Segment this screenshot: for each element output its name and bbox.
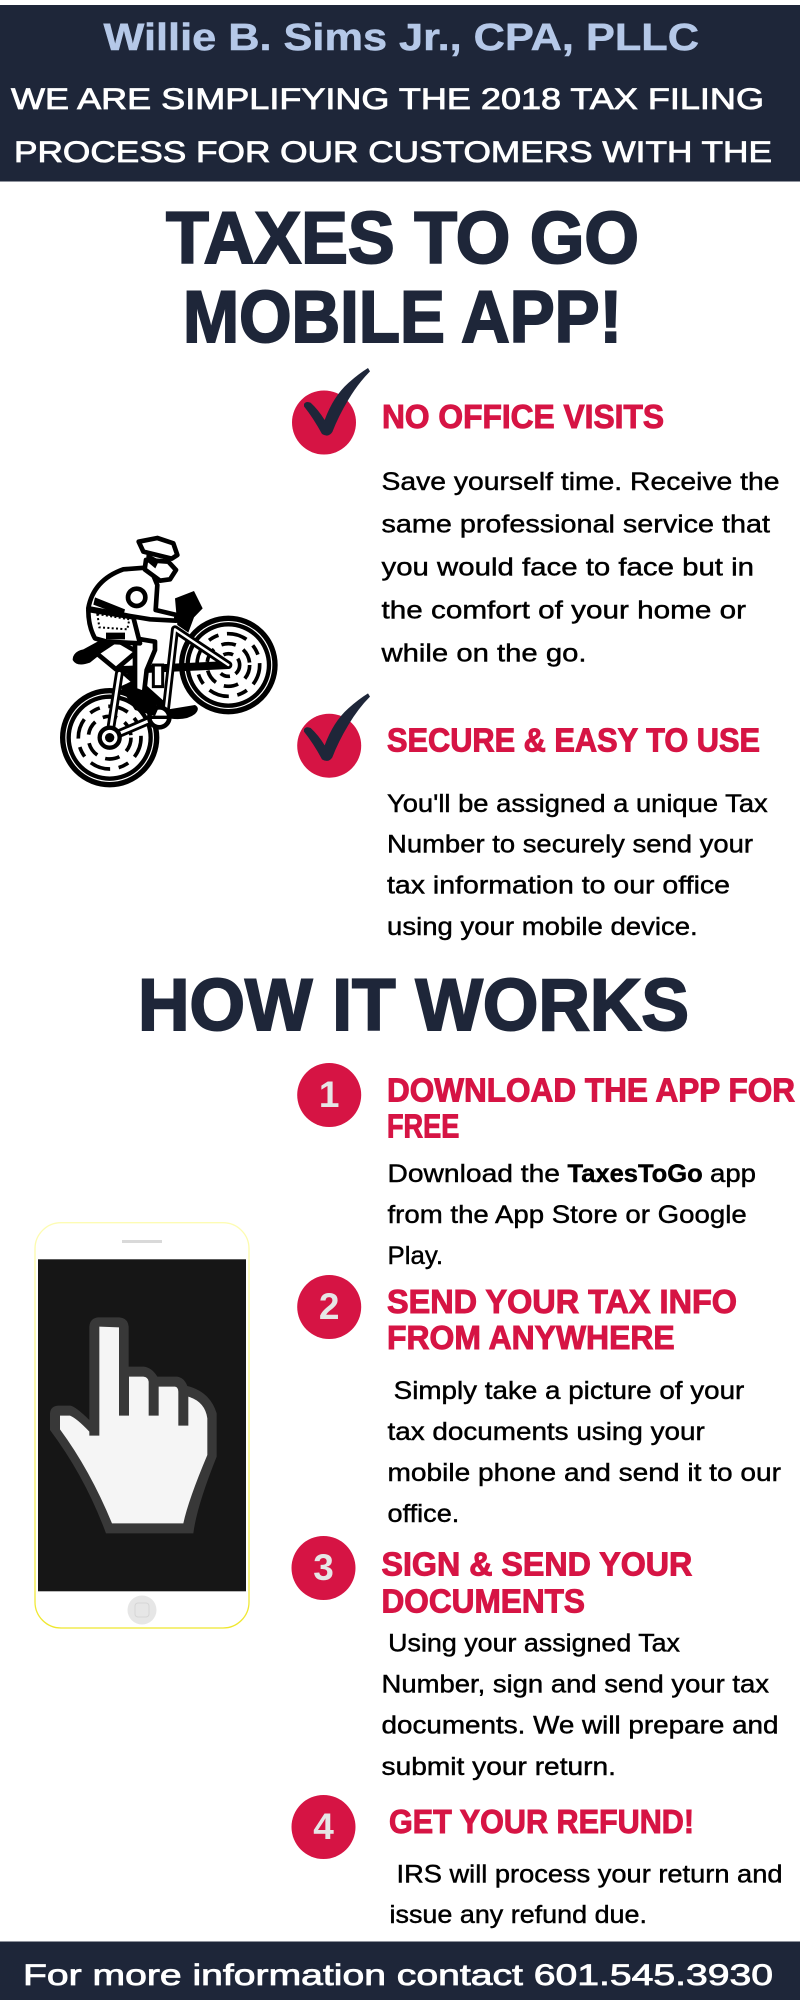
text: step 3 body: documents. We will prepare and: [382, 1712, 778, 1740]
text: step 3 body: submit your return.: [382, 1753, 616, 1781]
text: step 4 body: [390, 1861, 782, 1929]
icon: pointing hand: [50, 1317, 217, 1533]
text: contact line: For more information contact 601.545.3930: [23, 1959, 773, 1992]
text: step 3 body: [382, 1630, 778, 1781]
heading: step 2: SEND YOUR TAX INFO: [387, 1283, 737, 1320]
icon: cyclist body: [88, 538, 177, 693]
heading: firm name: Willie B. Sims Jr., CPA, PLLC: [104, 17, 699, 59]
text: secure and easy body: tax information to our office: [387, 872, 730, 900]
text: step 4 body: IRS will process your return and: [396, 1861, 782, 1889]
text: no office visits body: Save yourself time. Receive the: [382, 468, 780, 496]
text: step 1 body: Play.: [388, 1242, 443, 1270]
icon: rear wheel: [63, 691, 157, 785]
text: no office visits body: same professional service that: [382, 511, 770, 539]
heading: step 3: DOCUMENTS: [382, 1583, 585, 1620]
text: step 2 body: mobile phone and send it to our: [388, 1459, 781, 1487]
panel: footer band: [0, 1942, 800, 2000]
panel: step 3: [292, 1536, 778, 1781]
icon: number 2 badge: 2: [319, 1286, 339, 1327]
panel: step 4: [292, 1795, 782, 1929]
text: secure and easy body: Number to securely send your: [387, 831, 753, 859]
icon: number 3 badge: 3: [313, 1547, 334, 1588]
heading: step 1: [387, 1072, 795, 1145]
icon: cyclist jersey details: [93, 553, 163, 687]
icon: check mark badge one: [292, 368, 370, 454]
icon: number 2 badge: [297, 1275, 361, 1339]
text: intro line two: PROCESS FOR OUR CUSTOMERS WITH THE: [14, 136, 772, 169]
title: [166, 198, 639, 358]
heading: step 2: [387, 1283, 737, 1356]
icon: number 4 badge: 4: [313, 1806, 334, 1847]
heading: step 3: SIGN & SEND YOUR: [382, 1546, 692, 1583]
text: step 4 body: issue any refund due.: [390, 1901, 647, 1929]
text: step 2 body: office.: [388, 1500, 459, 1528]
heading: secure and easy to use: SECURE & EASY TO USE: [387, 721, 760, 758]
icon: number 1 badge: 1: [319, 1074, 339, 1115]
text: step 1 body: TaxesToGo: [568, 1160, 703, 1188]
title: TAXES TO GO: [166, 198, 639, 279]
icon: number 1 badge: [297, 1063, 361, 1127]
title: MOBILE APP!: [183, 277, 622, 358]
icon: number 3 badge: [292, 1536, 356, 1600]
heading: step 2: FROM ANYWHERE: [387, 1319, 675, 1356]
icon: bike frame: [100, 629, 228, 748]
panel: header band: [0, 5, 800, 182]
text: no office visits body: you would face to face but in: [382, 554, 754, 582]
text: step 3 body: Using your assigned Tax: [388, 1630, 681, 1658]
text: step 1 body: [388, 1160, 756, 1270]
heading: step 4: GET YOUR REFUND!: [389, 1803, 694, 1840]
icon: phone with pointing hand: [35, 1223, 249, 1628]
icon: cyclist on a bike: [63, 538, 275, 785]
text: step 1 body: from the App Store or Google: [388, 1201, 747, 1229]
text: step 1 body: app: [710, 1160, 756, 1188]
text: secure and easy body: You'll be assigned a unique Tax: [387, 790, 768, 818]
icon: number 4 badge: [292, 1795, 356, 1859]
heading: step 3: [382, 1546, 692, 1620]
text: secure and easy body: using your mobile device.: [387, 913, 698, 941]
heading: how it works: HOW IT WORKS: [138, 965, 689, 1046]
text: no office visits body: [380, 468, 780, 668]
text: step 2 body: tax documents using your: [388, 1418, 705, 1446]
panel: step 1: [297, 1063, 795, 1270]
text: no office visits body: while on the go.: [380, 640, 586, 668]
text: step 2 body: [388, 1377, 781, 1528]
icon: front wheel: [182, 618, 275, 712]
panel: step 2: [297, 1275, 781, 1528]
icon: cyclist feet and pedals: [73, 591, 203, 719]
text: step 1 body: Download the: [388, 1160, 560, 1188]
heading: step 1: FREE: [387, 1108, 459, 1145]
heading: no office visits: NO OFFICE VISITS: [382, 398, 664, 435]
text: no office visits body: the comfort of your home or: [382, 597, 746, 625]
text: step 3 body: Number, sign and send your tax: [382, 1671, 770, 1699]
text: intro line one: WE ARE SIMPLIFYING THE 2018 TAX FILING: [11, 83, 764, 116]
text: secure and easy body: [387, 790, 768, 941]
icon: check mark badge two: [297, 693, 370, 778]
text: step 2 body: Simply take a picture of your: [394, 1377, 744, 1405]
